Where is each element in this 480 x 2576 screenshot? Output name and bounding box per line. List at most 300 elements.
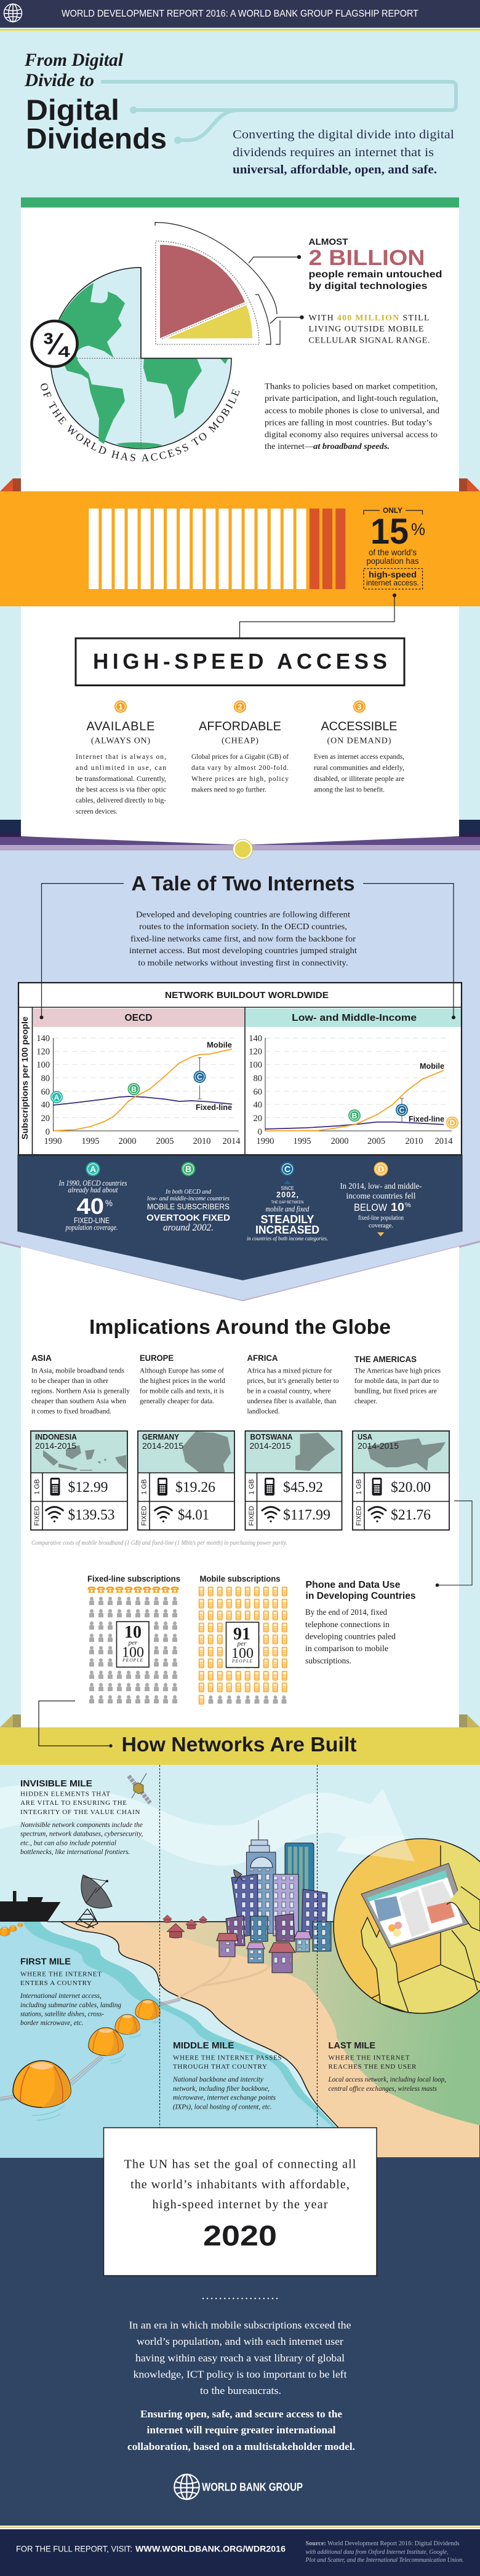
callout: 2 billion: 2 BILLION <box>309 246 425 270</box>
green gradient overlay <box>138 1922 480 2125</box>
line chart: OECD <box>36 1034 241 1146</box>
badge: C <box>396 1104 408 1116</box>
pictogram: fixed-line subscriptions: 10 <box>124 1623 142 1642</box>
source note <box>305 2540 464 2564</box>
block: last mile: Local access network, including local loop, <box>328 2075 446 2083</box>
note A <box>58 1162 127 1232</box>
curved caption: OF THE WORLD HAS ACCESS TO MOBILE <box>41 384 240 461</box>
pictogram: mobile subscriptions: per <box>237 1640 247 1647</box>
region: africa: undersea fiber is available, than <box>247 1398 337 1405</box>
note C: SINCE <box>281 1186 294 1191</box>
panel: chart notes <box>18 1155 462 1280</box>
block: invisible mile: spectrum, network databases, cybersecurity, <box>20 1829 143 1838</box>
pictogram: fixed-line subscriptions: PEOPLE <box>122 1657 143 1663</box>
region: asia <box>31 1353 130 1416</box>
note C: mobile and fixed <box>266 1205 310 1213</box>
note C: THE GAP BETWEEN <box>271 1200 304 1205</box>
column: available: 1 <box>119 702 123 711</box>
block: last mile: WHERE THE INTERNET <box>329 2055 410 2062</box>
region: africa: prices, but it’s generally better to <box>247 1377 339 1385</box>
line chart: low- and middle-income: 2010 <box>405 1136 423 1146</box>
translucent arrow <box>0 1785 415 1866</box>
footer <box>0 2526 480 2576</box>
header bar <box>0 0 480 31</box>
line chart: OECD: 40 <box>41 1100 50 1110</box>
note A: A <box>90 1164 96 1174</box>
block: invisible mile: Nonvisible network components include the <box>20 1820 143 1829</box>
connector lines <box>101 82 456 144</box>
note C: 2002, <box>276 1191 298 1199</box>
region: europe: EUROPE <box>140 1353 174 1363</box>
block: middle mile: MIDDLE MILE <box>173 2040 234 2051</box>
note B <box>146 1162 230 1233</box>
badge: three quarters <box>32 321 78 367</box>
column: affordable: 2 <box>238 702 242 711</box>
card: usa: $20.00 <box>391 1480 431 1496</box>
connector lines: tale heading to chart <box>39 884 455 1020</box>
closing paragraph: internet will require greater international <box>146 2424 336 2436</box>
badge: C: C <box>399 1106 405 1114</box>
line chart: OECD: 120 <box>36 1047 50 1057</box>
intro paragraph <box>233 128 454 176</box>
region: europe: for mobile calls and texts, it is <box>140 1388 225 1395</box>
paragraph: policies <box>265 382 439 451</box>
pictogram: mobile subscriptions: PEOPLE <box>231 1659 253 1664</box>
region: africa: AFRICA <box>247 1353 278 1363</box>
column: affordable: Global prices for a Gigabit (GB) of <box>191 753 289 761</box>
line chart: low- and middle-income: 2005 <box>367 1136 385 1146</box>
closing paragraph: world’s population, and with each internet user <box>137 2336 343 2347</box>
badge: B <box>128 1083 140 1095</box>
callout: UN goal: high-speed internet by the year <box>153 2198 328 2211</box>
connector: banner to box <box>240 595 394 638</box>
column: accessible <box>314 701 404 793</box>
line chart: OECD: 80 <box>41 1074 50 1084</box>
callout: UN goal: 2020 <box>203 2220 277 2252</box>
callout: 2 billion: by digital technologies <box>309 281 428 291</box>
paragraph: tale intro: fixed-line networks came first, and now form the backbone for <box>130 935 356 944</box>
card: germany: FIXED <box>140 1506 148 1526</box>
badge: B <box>348 1109 361 1122</box>
note D: income countries fell <box>346 1192 416 1201</box>
block: invisible mile: ARE VITAL TO ENSURING THE <box>20 1799 127 1807</box>
intro paragraph: dividends requires an internet that is <box>233 146 434 159</box>
main title: Digital <box>26 93 119 126</box>
callout: 2 billion <box>309 237 442 291</box>
block: last mile: central office exchanges, wireless masts <box>329 2084 437 2093</box>
paragraph: policies: prices are falling in most countries. But today’s <box>265 418 432 428</box>
column: accessible: disabled, or illiterate people are <box>314 775 404 783</box>
horizon line <box>47 1921 335 1922</box>
source note: with additional data from Oxford Internet Institute, Google, <box>305 2548 449 2556</box>
closing paragraph: In an era in which mobile subscriptions exceed the <box>129 2320 351 2331</box>
block: invisible mile: INVISIBLE MILE <box>20 1778 92 1789</box>
line chart: low- and middle-income: 120 <box>249 1047 262 1057</box>
line chart: OECD: 20 <box>41 1114 50 1124</box>
icon: satellite <box>129 1773 150 1803</box>
card: botswana: $45.92 <box>283 1480 323 1496</box>
line chart: OECD: 2010 <box>193 1136 210 1146</box>
column: affordable: makers need to go further. <box>191 786 266 793</box>
pictogram: fixed-line subscriptions <box>87 1574 180 1703</box>
paragraph: policies: Thanks to policies based on market competition, <box>265 382 438 392</box>
note B: around 2002. <box>163 1223 214 1233</box>
icon: satellite dish <box>76 1875 112 1928</box>
sand with coastline <box>60 1922 480 2158</box>
note D: coverage. <box>369 1223 393 1229</box>
note D: In 2014, low- and middle- <box>340 1182 422 1191</box>
card: indonesia: FIXED <box>33 1506 41 1526</box>
card: indonesia: $12.99 <box>68 1480 108 1496</box>
column: accessible: ACCESSIBLE <box>321 719 398 733</box>
paragraph: tale intro: to mobile networks without investing first in connectivity. <box>138 959 348 968</box>
note C: INCREASED <box>255 1224 319 1236</box>
note D: fixed-line population <box>358 1215 404 1221</box>
pictogram: mobile subscriptions: Mobile subscriptions <box>199 1574 281 1583</box>
card: botswana: $117.99 <box>283 1507 330 1523</box>
column: available: the best access is via fiber optic <box>76 786 166 793</box>
note A: In 1990, OECD countries <box>58 1179 127 1187</box>
region: asia: cheaper than southern Asia when <box>31 1398 126 1405</box>
stat: only 15 percent: ONLY <box>383 506 402 515</box>
source note: Plot and Scatter, and the International Telecommunication Union. <box>305 2556 464 2564</box>
chart panel: network buildout <box>18 983 462 1155</box>
section transition band <box>0 820 480 851</box>
line chart: OECD: 0 <box>46 1127 50 1137</box>
paragraph: tale intro: routes to the information society. In the OECD countries, <box>139 922 347 932</box>
block: invisible mile: bottlenecks, like international frontiers. <box>20 1847 130 1856</box>
icon: section marker <box>233 839 252 859</box>
text: phone and data use: telephone connections in <box>305 1620 390 1629</box>
column: affordable: AFFORDABLE <box>199 719 281 733</box>
column: available: be transformational. Currently, <box>76 775 166 783</box>
line chart: low- and middle-income <box>249 1034 458 1146</box>
card: usa: USA <box>358 1433 372 1441</box>
badge: A: A <box>54 1093 60 1102</box>
globe chart <box>30 267 240 461</box>
paragraph: policies: private participation, and light-touch regulation, <box>265 394 438 403</box>
card: indonesia: INDONESIA <box>35 1433 77 1441</box>
closing paragraph <box>127 2320 355 2452</box>
footer: WWW.WORLDBANK.ORG/WDR2016 <box>135 2543 286 2553</box>
region: the americas: THE AMERICAS <box>354 1354 417 1364</box>
column: available: Internet that is always on, <box>76 753 166 761</box>
bar chart: 15 percent <box>89 509 345 589</box>
block: invisible mile <box>20 1778 143 1856</box>
note D: BELOW <box>354 1202 387 1213</box>
intro paragraph: Converting the digital divide into digital <box>233 128 454 141</box>
divider lines <box>160 1765 318 2128</box>
card: usa: 2014-2015 <box>358 1441 399 1451</box>
callout: 2 billion: people remain untouched <box>309 269 442 280</box>
note A: % <box>105 1198 113 1209</box>
block: first mile: including submarine cables, landing <box>20 2000 121 2009</box>
card: indonesia <box>31 1431 127 1530</box>
city skyline <box>217 1820 331 1973</box>
block: first mile: FIRST MILE <box>20 1957 71 1967</box>
paragraph: policies: access to mobile phones is close to universal, and <box>265 406 439 416</box>
paragraph: policies: the internet—at broadband speeds. <box>265 442 390 451</box>
region: europe: Although Europe has some of <box>140 1368 224 1375</box>
column: affordable: Where prices are high, policy <box>191 775 289 783</box>
illustration: network landscape <box>0 1765 480 2158</box>
block: invisible mile: HIDDEN ELEMENTS THAT <box>20 1791 110 1798</box>
line chart: low- and middle-income: Mobile <box>420 1062 444 1071</box>
callout: UN goal: the world’s inhabitants with affordable, <box>130 2178 350 2191</box>
block: invisible mile: INTEGRITY OF THE VALUE CHAIN <box>20 1809 140 1816</box>
block: last mile <box>328 2040 446 2093</box>
note C <box>247 1162 328 1242</box>
note B: MOBILE SUBSCRIBERS <box>147 1203 230 1211</box>
card: germany: 2014-2015 <box>142 1441 183 1451</box>
line chart: low- and middle-income: 80 <box>254 1074 262 1084</box>
closing paragraph: knowledge, ICT policy is too important to be left <box>133 2368 347 2380</box>
region: asia: regions. Northern Asia is generally <box>31 1388 130 1395</box>
sea <box>0 1922 480 2158</box>
text: phone and data use: By the end of 2014, fixed <box>305 1607 387 1617</box>
yellow banner <box>0 1710 480 1765</box>
note D: 10 <box>391 1201 404 1213</box>
connector: implications to networks <box>39 1701 113 1748</box>
lens: tablet close-up <box>332 1836 480 2029</box>
block: first mile: WHERE THE INTERNET <box>20 1970 102 1978</box>
card: germany: 1 GB <box>140 1479 148 1495</box>
card: germany <box>138 1431 234 1530</box>
column: available: and unlimited in use, can <box>76 764 166 772</box>
pictogram: mobile subscriptions <box>199 1574 287 1704</box>
buoys <box>0 1923 161 2120</box>
line chart: low- and middle-income: 1995 <box>293 1136 311 1146</box>
main title: Dividends <box>26 122 167 155</box>
line chart: low- and middle-income: 2000 <box>331 1136 348 1146</box>
stat: only 15 percent: 15 <box>370 512 409 552</box>
region: africa: Africa has a mixed picture for <box>247 1368 332 1375</box>
sky <box>0 1765 480 1922</box>
line chart: low- and middle-income: 2014 <box>434 1136 453 1146</box>
axis title: Subscriptions per 100 people <box>20 1017 30 1139</box>
region: europe: the highest prices in the world <box>140 1377 225 1385</box>
block: first mile: border microwave, etc. <box>20 2018 84 2027</box>
paragraph: policies: digital economy also requires universal access to <box>265 430 438 440</box>
column: affordable: (CHEAP) <box>222 737 258 745</box>
card: botswana: FIXED <box>248 1506 255 1526</box>
block: middle mile: network, including fiber backbone, <box>173 2084 270 2093</box>
note B: low- and middle-income countries <box>147 1195 230 1202</box>
stat: only 15 percent: internet access. <box>366 578 419 587</box>
card: indonesia: 2014-2015 <box>35 1441 76 1451</box>
line chart: low- and middle-income: 0 <box>258 1127 262 1137</box>
block: middle mile: (IXPs), local hosting of content, etc. <box>173 2102 272 2110</box>
callout: 400 million: CELLULAR SIGNAL RANGE. <box>309 336 430 346</box>
region: the americas: The Americas have high prices <box>354 1368 441 1375</box>
card: usa <box>353 1431 449 1530</box>
column: accessible: rural communities and elderly, <box>314 764 404 772</box>
white column below chevron <box>21 1246 459 1714</box>
region: the americas <box>354 1354 441 1405</box>
region: africa: landlocked. <box>247 1408 280 1416</box>
teal coastal band <box>23 1922 480 2158</box>
text: phone and data use: developing countries paled <box>305 1632 396 1641</box>
block: middle mile <box>172 2040 282 2110</box>
block: first mile: International internet access, <box>20 1991 102 2000</box>
column: affordable: data vary by almost 200-fold. <box>191 764 289 772</box>
callout: 400 million: WITH 400 MILLION STILL <box>309 314 430 323</box>
heading: tale of two internets: A Tale of Two Internets <box>132 872 354 895</box>
region: the americas: bundling, but fixed prices are <box>354 1388 437 1395</box>
card: botswana: 1 GB <box>248 1479 255 1495</box>
chart title: NETWORK BUILDOUT WORLDWIDE <box>165 990 329 1001</box>
column: available <box>76 701 166 815</box>
closing paragraph: having within easy reach a vast library of global <box>135 2352 345 2364</box>
note C: in countries of both income categories. <box>247 1235 328 1242</box>
line chart: OECD: 1990 <box>44 1136 62 1146</box>
note D: D <box>378 1164 384 1174</box>
main title: From Digital <box>24 50 124 70</box>
stat: only 15 percent <box>364 506 425 589</box>
note A: already had about <box>68 1186 118 1194</box>
badge: C: C <box>197 1072 202 1081</box>
column: available: (ALWAYS ON) <box>91 737 150 745</box>
card: botswana <box>245 1431 342 1530</box>
stat: only 15 percent: % <box>411 520 425 539</box>
dotted divider <box>203 2297 278 2299</box>
note C: C <box>284 1164 290 1174</box>
pictogram: mobile subscriptions: 100 <box>231 1646 254 1662</box>
region: asia: In Asia, mobile broadband tends <box>31 1368 125 1375</box>
intro paragraph: universal, affordable, open, and safe. <box>233 163 437 176</box>
block: last mile: LAST MILE <box>329 2040 375 2051</box>
badge: C <box>193 1071 206 1083</box>
note B: OVERTOOK FIXED <box>146 1213 230 1223</box>
region: asia: to be cheaper than in other <box>31 1377 108 1385</box>
panel: white content column <box>21 197 459 841</box>
column: available: screen devices. <box>76 808 118 815</box>
world bank group logo: WORLD BANK GROUP <box>202 2481 303 2493</box>
pictogram: fixed-line subscriptions: Fixed-line subscriptions <box>87 1574 180 1583</box>
badge: B: B <box>131 1085 137 1093</box>
card: botswana: 2014-2015 <box>250 1441 290 1451</box>
region: africa <box>247 1353 339 1416</box>
line chart: OECD: 100 <box>36 1060 50 1070</box>
note B: B <box>185 1164 191 1174</box>
text: phone and data use <box>305 1580 416 1665</box>
card: usa: FIXED <box>356 1506 363 1526</box>
closing paragraph: collaboration, based on a multistakeholder model. <box>127 2441 355 2452</box>
cables <box>0 1998 181 2098</box>
column: available: AVAILABLE <box>86 719 155 733</box>
heading: high-speed access: HIGH-SPEED ACCESS <box>93 649 387 674</box>
region: africa: be in a coastal country, where <box>247 1388 331 1395</box>
paragraph: tale intro <box>129 910 357 968</box>
main title: Divide to <box>24 70 94 90</box>
region: asia: it comes to fixed broadband. <box>31 1408 111 1416</box>
note A: 40 <box>76 1194 104 1219</box>
yellow wedge <box>167 305 252 338</box>
panel: a tale of two internets <box>0 850 480 1301</box>
note A: population coverage. <box>65 1223 118 1232</box>
callout: UN goal: The UN has set the goal of connecting all <box>124 2157 356 2171</box>
shallow water <box>40 1922 480 2158</box>
callout: 2 billion: ALMOST <box>309 237 348 247</box>
orange banner <box>0 478 480 606</box>
label: low- and middle-income: Low- and Middle-Income <box>292 1013 417 1023</box>
column: accessible: (ON DEMAND) <box>327 737 391 745</box>
column: available: cables, delivered directly to big- <box>76 797 166 804</box>
column: accessible: 3 <box>358 702 362 711</box>
paragraph: tale intro: Developed and developing countries are following different <box>136 910 350 920</box>
card: usa: $21.76 <box>391 1507 431 1523</box>
stat: only 15 percent: population has <box>367 557 419 566</box>
note D: % <box>405 1202 411 1209</box>
connector: cards to phone data <box>436 1501 472 1587</box>
badge: A <box>50 1091 63 1103</box>
line chart: low- and middle-income: 20 <box>254 1114 262 1124</box>
text: phone and data use: in Developing Countries <box>305 1591 416 1601</box>
line chart: OECD: 2014 <box>223 1136 241 1146</box>
column: accessible: among the last to benefit. <box>314 786 385 793</box>
callout: 400 million <box>309 314 430 346</box>
pictogram: mobile subscriptions: 91 <box>233 1625 250 1644</box>
card: germany: GERMANY <box>142 1433 180 1441</box>
callout: 400 million: LIVING OUTSIDE MOBILE <box>309 325 423 334</box>
navy closing panel <box>0 2158 480 2526</box>
block: first mile <box>20 1957 121 2027</box>
line chart: low- and middle-income: 140 <box>249 1034 262 1044</box>
label: OECD: OECD <box>124 1013 153 1023</box>
line chart: OECD: Mobile <box>207 1040 232 1049</box>
block: last mile: REACHES THE END USER <box>329 2063 417 2071</box>
block: middle mile: microwave, internet exchange points <box>173 2093 276 2102</box>
column: accessible: Even as internet access expands, <box>314 753 404 761</box>
text: phone and data use: Phone and Data Use <box>305 1580 401 1590</box>
heading: implications: Implications Around the Globe <box>89 1315 391 1338</box>
badge: three quarters: ¾ <box>42 327 71 361</box>
closing paragraph: Ensuring open, safe, and secure access to the <box>140 2408 342 2420</box>
callout: UN goal <box>103 2128 377 2275</box>
block: middle mile: WHERE THE INTERNET PASSES <box>173 2055 282 2062</box>
line chart: OECD: 1995 <box>81 1136 100 1146</box>
line chart: OECD: 2005 <box>156 1136 174 1146</box>
region: the americas: for mobile data, in part due to <box>354 1377 439 1385</box>
line chart: low- and middle-income: Fixed-line <box>409 1115 444 1124</box>
land masses <box>58 283 228 449</box>
icon: world bank globe <box>4 4 22 22</box>
footer link text: FOR THE FULL REPORT, VISIT: <box>16 2543 132 2553</box>
region: asia: ASIA <box>31 1353 52 1363</box>
block: first mile: ENTERS A COUNTRY <box>20 1980 92 1987</box>
badge: D: D <box>450 1119 455 1127</box>
heading: how networks are built: How Networks Are Built <box>122 1733 357 1756</box>
main title <box>24 50 167 155</box>
card: germany: $4.01 <box>178 1507 209 1523</box>
header title: WORLD DEVELOPMENT REPORT 2016: A WORLD BANK GROUP FLAGSHIP REPORT <box>62 9 418 19</box>
line chart: low- and middle-income: 40 <box>254 1100 262 1110</box>
card: usa: 1 GB <box>356 1479 363 1495</box>
red wedge <box>160 245 245 338</box>
card: indonesia: $139.53 <box>68 1507 114 1523</box>
heading: high-speed access <box>76 638 404 685</box>
line chart: OECD: 60 <box>41 1087 50 1097</box>
roads <box>177 1954 302 1998</box>
region: europe <box>140 1353 225 1405</box>
badge: D <box>446 1117 458 1129</box>
footnote: Comparative costs of mobile broadband (1 GB) and fixed-line (1 Mbit/s per month) in purchasing power parity. <box>31 1540 287 1547</box>
closing paragraph: to the bureaucrats. <box>200 2385 281 2396</box>
world bank group logo <box>174 2475 303 2499</box>
quarter pie chart <box>155 223 304 344</box>
stat: only 15 percent: of the world’s <box>369 548 417 557</box>
block: middle mile: National backbone and intercity <box>172 2075 264 2083</box>
